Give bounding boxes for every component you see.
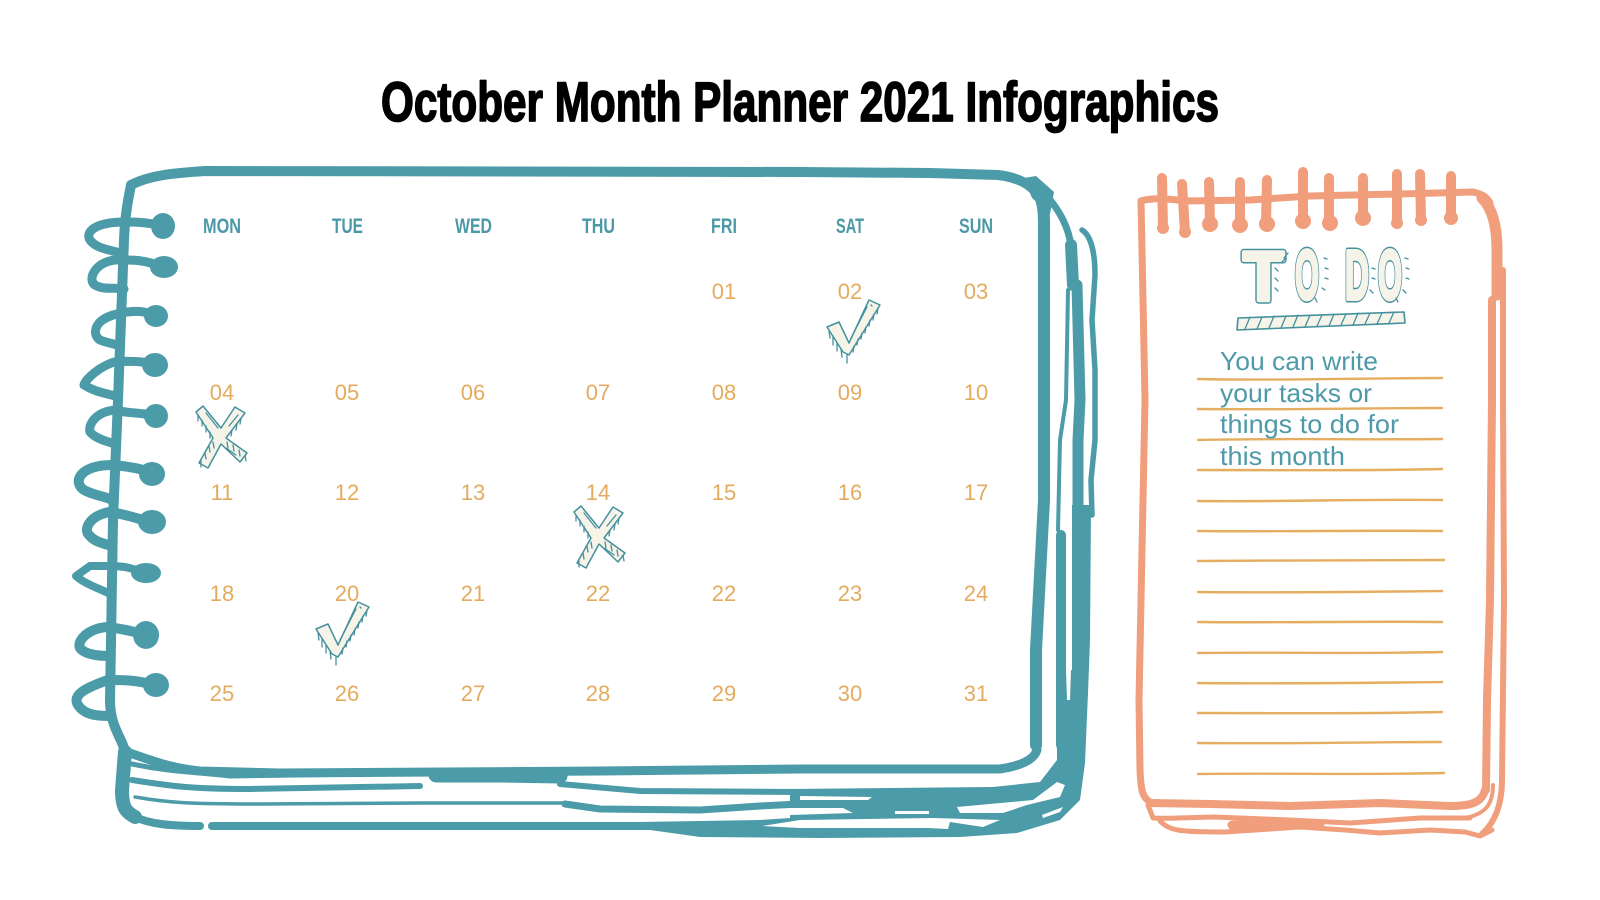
ring 9 (79, 621, 159, 656)
notepad top edge (1141, 192, 1490, 203)
calendar dates: 30 (838, 681, 862, 706)
calendar dates: 25 (210, 681, 234, 706)
calendar dates: 05 (335, 380, 359, 405)
notepad spiral rings (1157, 172, 1458, 238)
to-do instruction text: things to do for (1220, 409, 1399, 439)
calendar dates: 02 (838, 279, 862, 304)
second page thin strand (1058, 290, 1068, 530)
calendar dates: 08 (712, 380, 736, 405)
ring 3 (95, 305, 168, 346)
corner blob (1024, 176, 1054, 214)
calendar dates: 17 (964, 480, 988, 505)
ring 5 (90, 404, 168, 443)
ring 1 (89, 213, 175, 254)
to-do heading lettering: O (1378, 236, 1402, 314)
calendar dates: 23 (838, 581, 862, 606)
calendar dates: 01 (712, 279, 736, 304)
calendar dates: 26 (335, 681, 359, 706)
merged stack section (1232, 820, 1320, 830)
calendar dates: 28 (586, 681, 610, 706)
calendar dates: 20 (335, 581, 359, 606)
weekday headers: WED (455, 215, 492, 238)
to-do heading lettering: D (1345, 236, 1369, 314)
ring 8 (76, 563, 161, 593)
calendar dates: 11 (211, 480, 233, 505)
weekday headers: SAT (836, 215, 864, 238)
weekday headers: THU (582, 215, 615, 238)
third page right edge (1077, 285, 1080, 520)
calendar dates: 10 (964, 380, 988, 405)
notepad right edge (1486, 300, 1492, 790)
weekday headers (203, 215, 993, 238)
calendar dates: 18 (210, 581, 234, 606)
to-do heading lettering: D (1345, 236, 1369, 314)
weekday headers: MON (203, 215, 241, 238)
second page top edge (1042, 190, 1070, 240)
to-do underline bar (1237, 312, 1405, 330)
to-do instruction text: this month (1220, 441, 1345, 471)
second page corner (1465, 785, 1493, 818)
page stack line upper (1148, 805, 1470, 823)
notepad ruled lines (1198, 378, 1444, 774)
binding corner (122, 752, 135, 817)
second page lower strand (1056, 535, 1066, 745)
title: October Month Planner 2021 Infographics (381, 70, 1219, 133)
calendar dates: 27 (461, 681, 485, 706)
calendar dates (210, 279, 988, 706)
spiral binding (76, 213, 178, 716)
calendar dates: 24 (964, 581, 988, 606)
calendar dates: 06 (461, 380, 485, 405)
to-do heading lettering: T (1243, 237, 1284, 315)
ring 2 (92, 256, 178, 289)
notepad bottom edge (1150, 790, 1485, 806)
icon: check mark on 02 (827, 300, 880, 363)
to-do heading lettering: T (1243, 237, 1284, 315)
to-do heading lettering (1243, 236, 1409, 315)
icon: cross mark on 14 (574, 506, 625, 568)
main page outline right (1036, 195, 1044, 745)
calendar dates: 03 (964, 279, 988, 304)
calendar dates: 07 (586, 380, 610, 405)
icon: check mark on 20 (316, 602, 369, 665)
to-do heading lettering: O (1378, 236, 1402, 314)
notepad left edge (1139, 201, 1150, 802)
top right corner (1482, 198, 1497, 295)
weekday headers: FRI (711, 215, 737, 238)
to-do notepad frame (1139, 192, 1504, 836)
to-do heading lettering: O (1295, 236, 1319, 314)
to-do instruction text: You can write (1220, 346, 1378, 376)
calendar dates: 21 (461, 581, 485, 606)
icon: cross mark on 04 (196, 406, 247, 468)
calendar dates: 12 (335, 480, 359, 505)
calendar notebook frame (110, 171, 1095, 838)
to-do heading lettering: O (1295, 236, 1319, 314)
ring 6 (79, 462, 165, 500)
main page outline top (131, 171, 1038, 195)
weekday headers: TUE (332, 215, 363, 238)
second page thick segment (1071, 245, 1073, 285)
calendar dates: 13 (461, 480, 485, 505)
ring 7 (87, 510, 166, 546)
calendar dates: 14 (586, 480, 610, 505)
calendar dates: 31 (964, 681, 988, 706)
fourth page right edge (1082, 230, 1095, 515)
to-do instruction text: your tasks or (1220, 378, 1372, 408)
calendar dates: 04 (210, 380, 234, 405)
page stack line lower (1160, 821, 1492, 836)
calendar dates: 22 (586, 581, 610, 606)
calendar dates: 09 (838, 380, 862, 405)
binding edge (110, 185, 131, 755)
weekday headers: SUN (959, 215, 993, 238)
lower page stack mass (420, 505, 1091, 838)
calendar dates: 16 (838, 480, 862, 505)
calendar dates: 29 (712, 681, 736, 706)
to-do instruction text (1220, 346, 1399, 471)
stacked page lines bottom (436, 775, 560, 776)
calendar dates: 15 (712, 480, 736, 505)
white slits in page stack (762, 640, 1072, 829)
calendar dates: 22 (712, 581, 736, 606)
main page outline bottom (127, 750, 1037, 773)
outer page edge (1482, 270, 1504, 834)
ring 10 (77, 673, 169, 716)
ring 4 (84, 353, 168, 396)
